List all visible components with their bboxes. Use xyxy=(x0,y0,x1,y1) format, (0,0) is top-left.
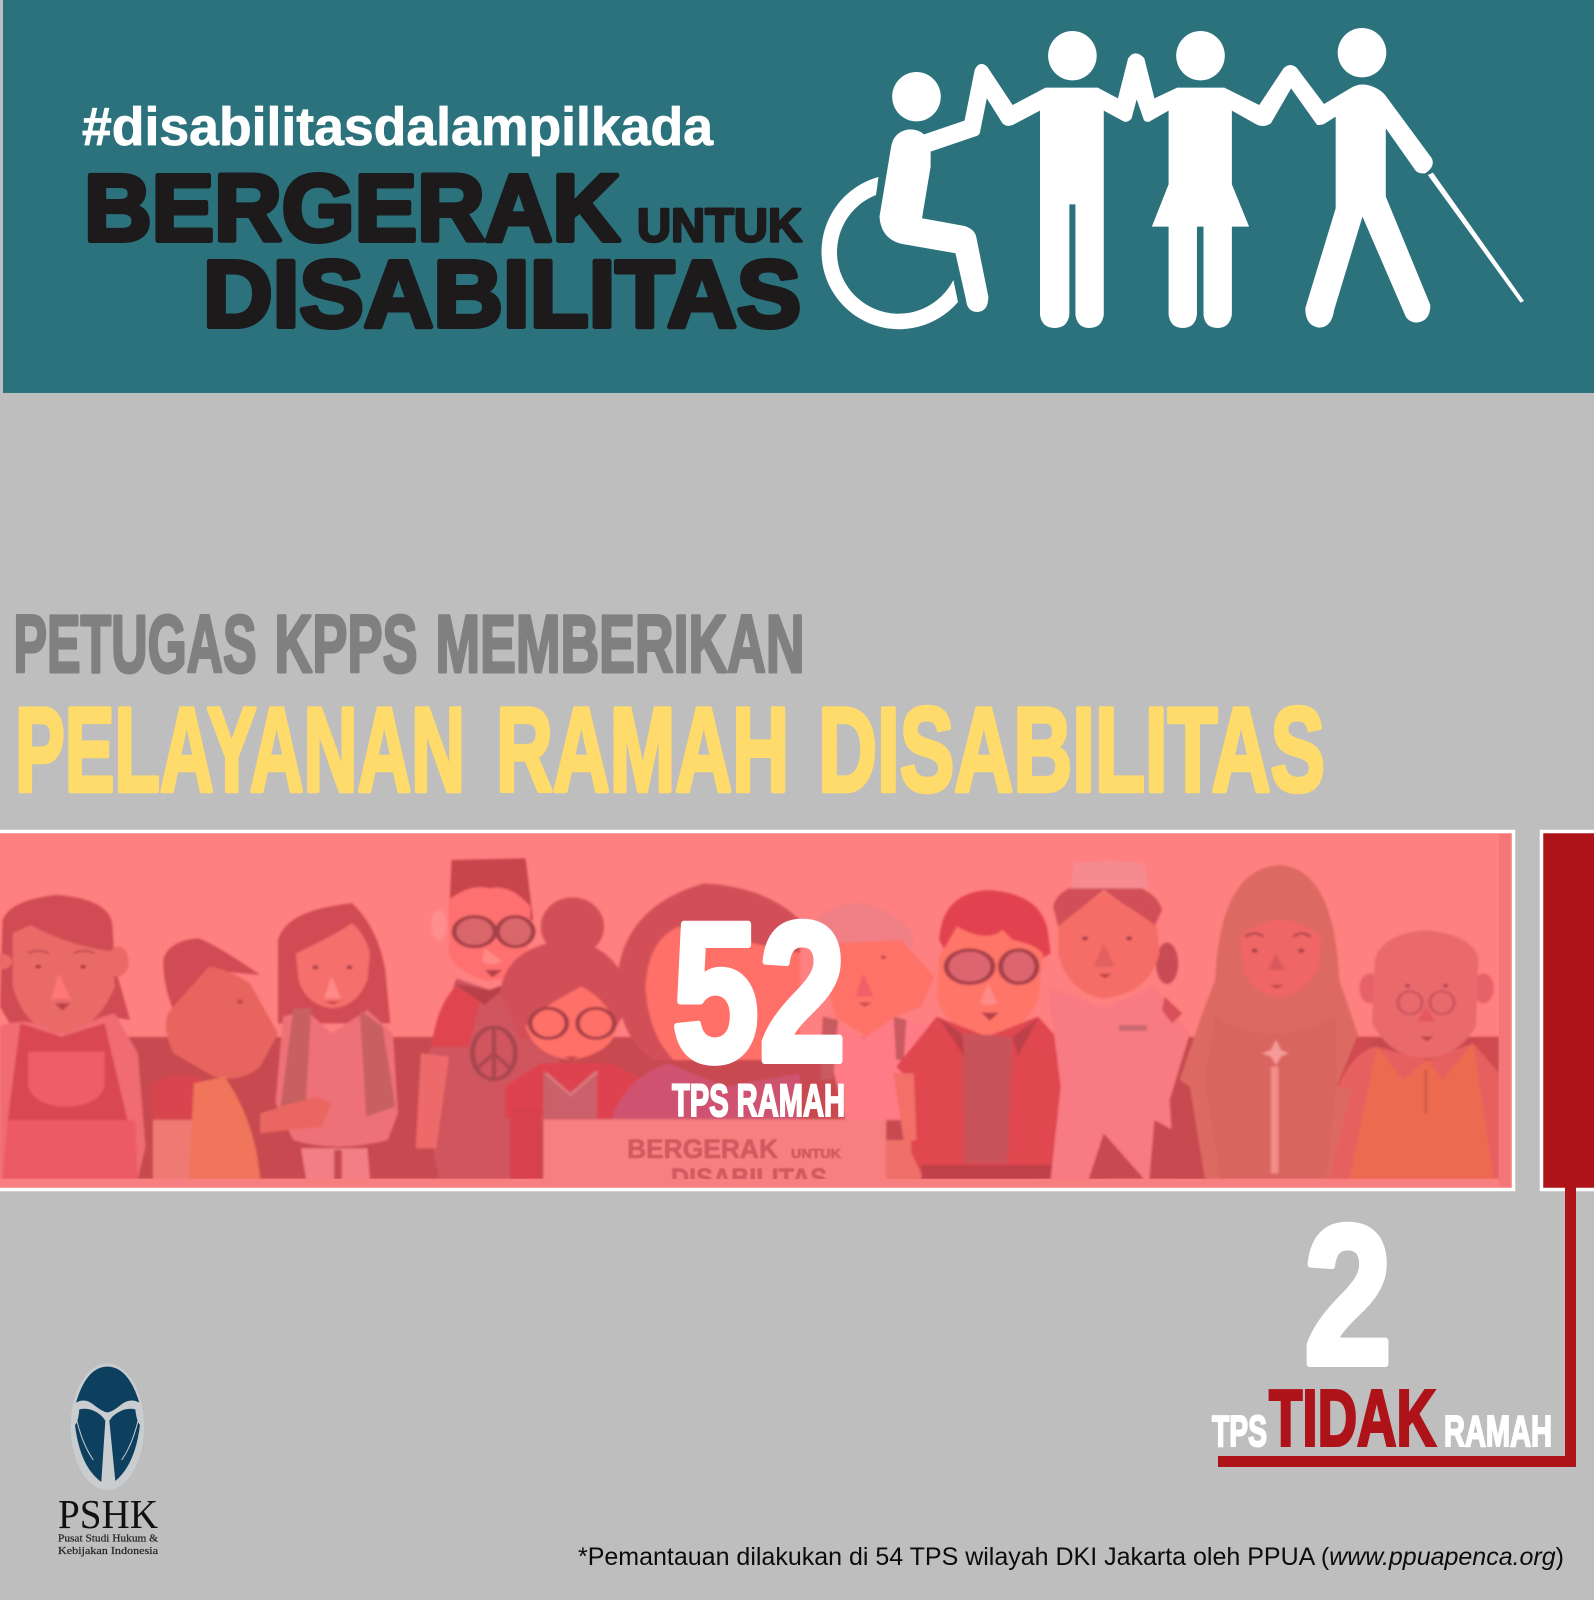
panel: teal header xyxy=(3,0,1594,393)
table xyxy=(543,1119,804,1183)
nurse xyxy=(1156,943,1178,984)
joined figures xyxy=(981,53,1433,328)
person 4 xyxy=(449,858,533,920)
logo subtitle xyxy=(58,1532,158,1557)
number: 2: 2 xyxy=(1304,1184,1392,1406)
title: BERGERAK UNTUK DISABILITAS: UNTUK xyxy=(637,200,802,252)
left half people xyxy=(0,858,804,1183)
logo subtitle: Kebijakan Indonesia xyxy=(58,1545,158,1557)
heading: PETUGAS KPPS MEMBERIKAN: MEMBERIKAN xyxy=(436,599,804,690)
heading: PELAYANAN RAMAH DISABILITAS xyxy=(15,683,1325,817)
back table edge xyxy=(802,1118,888,1179)
person 3 xyxy=(278,903,390,1023)
wheelchair user xyxy=(879,64,988,312)
number: 52: 52 xyxy=(672,882,846,1102)
title: BERGERAK UNTUK DISABILITAS xyxy=(84,156,802,348)
person 6: behind 52 xyxy=(617,883,800,1060)
logo subtitle: Pusat Studi Hukum & xyxy=(58,1532,158,1544)
table lettering: DISABILITAS xyxy=(671,1163,827,1193)
heading: PETUGAS KPPS MEMBERIKAN: PETUGAS xyxy=(14,599,256,690)
title: BERGERAK UNTUK DISABILITAS: BERGERAK xyxy=(84,156,620,262)
table lettering: UNTUK xyxy=(791,1146,842,1161)
connector: red bracket line xyxy=(1218,1187,1570,1462)
right half people xyxy=(795,861,1499,1183)
label: TPS TIDAK RAMAH: TIDAK xyxy=(1269,1374,1436,1462)
panel: red bar for 2 TPS xyxy=(1542,832,1594,1190)
table lettering: BERGERAK xyxy=(627,1134,778,1164)
wheelchair wheel xyxy=(822,177,958,329)
label: TPS TIDAK RAMAH: TPS xyxy=(1212,1407,1267,1456)
logo emblem xyxy=(71,1363,144,1490)
panel: 52 TPS ramah xyxy=(0,832,1513,1193)
heading: PELAYANAN RAMAH DISABILITAS: RAMAH xyxy=(496,683,789,817)
old man with orange vest xyxy=(1359,973,1374,1004)
background bench xyxy=(0,1037,1499,1179)
icon: four people with disabilities holding hands xyxy=(822,28,1524,329)
title: BERGERAK UNTUK DISABILITAS: DISABILITAS xyxy=(203,242,801,348)
red-haired man with glasses xyxy=(939,890,1051,963)
hashtag: #disabilitasdalampilkada xyxy=(82,98,714,157)
briefcase xyxy=(886,1140,924,1180)
person 5: bun xyxy=(541,897,604,956)
logo: PSHK xyxy=(58,1363,158,1557)
heading: PETUGAS KPPS MEMBERIKAN: KPPS xyxy=(274,599,418,690)
heading: PELAYANAN RAMAH DISABILITAS: PELAYANAN xyxy=(15,683,465,817)
footnote: *Pemantauan dilakukan di 54 TPS wilayah DKI Jakarta oleh PPUA (www.ppuapenca.org) xyxy=(578,1543,1564,1571)
person 2 xyxy=(163,938,260,1017)
illustration: group of citizens behind a table xyxy=(0,858,1499,1193)
white cane xyxy=(1428,173,1524,303)
table lettering xyxy=(628,1138,842,1179)
heading: PELAYANAN RAMAH DISABILITAS: DISABILITAS xyxy=(818,683,1325,817)
label: TPS RAMAH: TPS RAMAH xyxy=(672,1075,845,1126)
person 1 xyxy=(0,895,130,1033)
logo wordmark: PSHK xyxy=(58,1491,158,1537)
old person behind xyxy=(816,903,914,949)
heading: PETUGAS KPPS MEMBERIKAN xyxy=(14,599,804,690)
woman in hijab xyxy=(1180,865,1362,1179)
